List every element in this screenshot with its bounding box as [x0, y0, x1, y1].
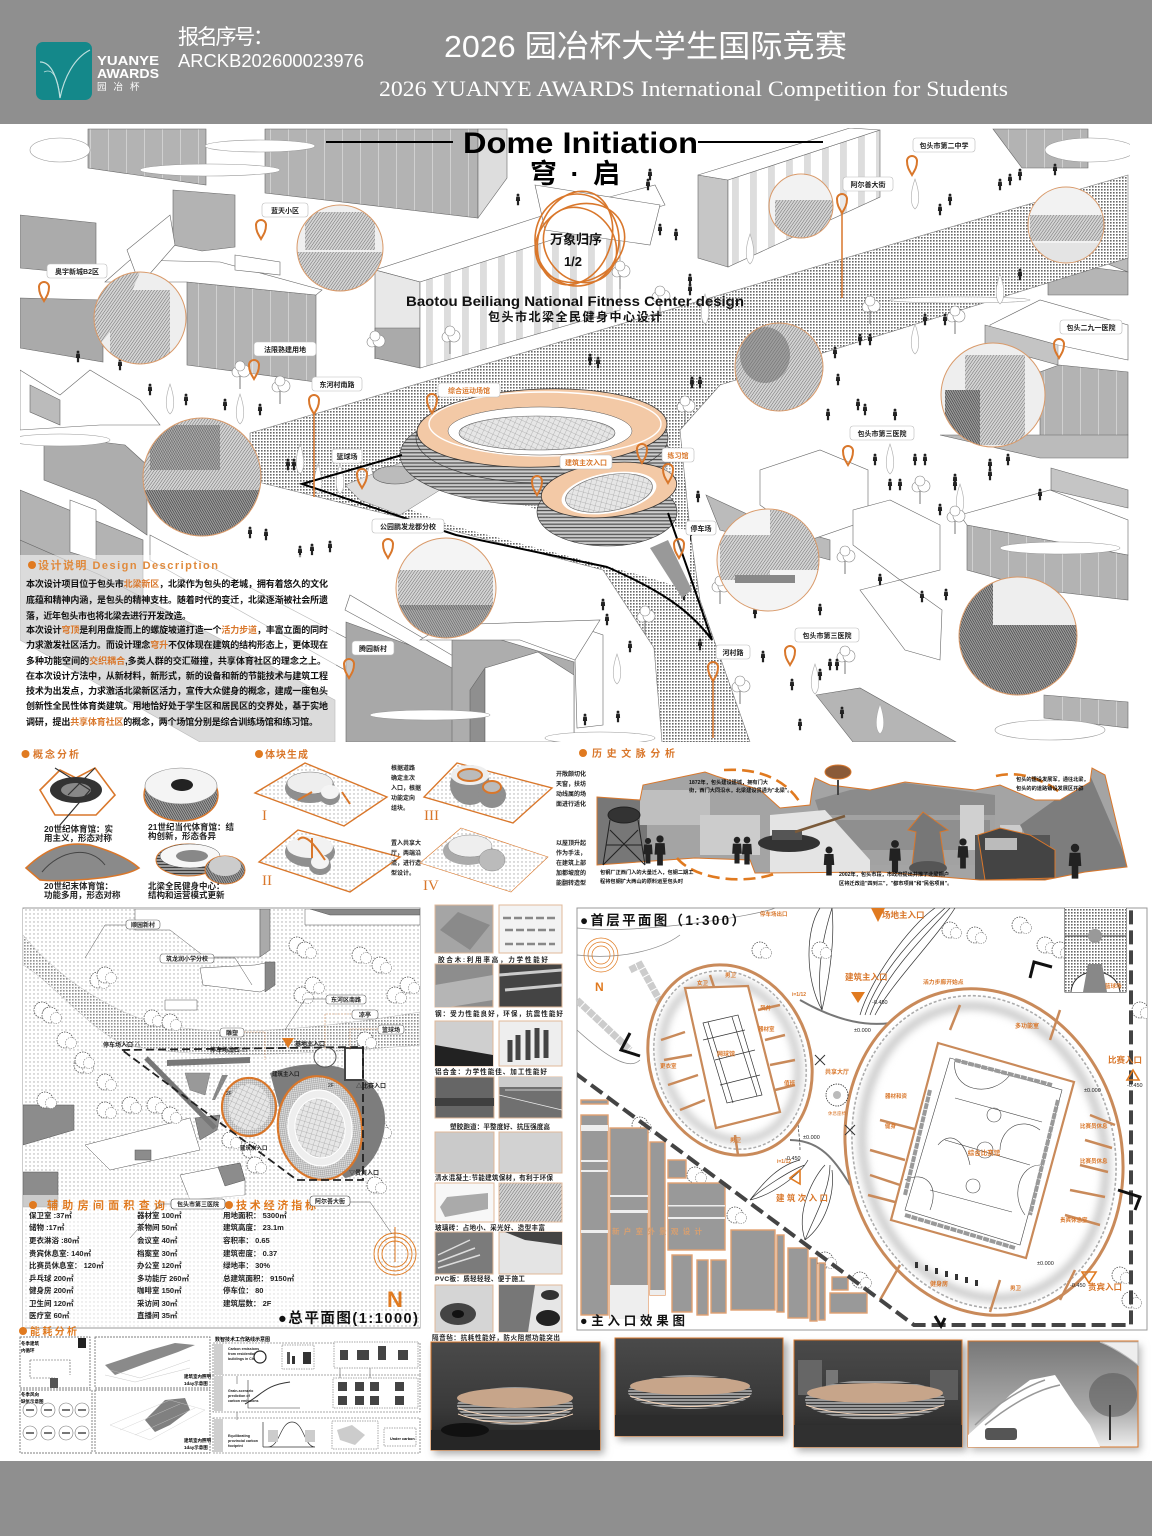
wind diagram: 缺氧示意图: [21, 1398, 44, 1405]
surrounding buildings: [23, 909, 420, 1207]
location labels: 公园鹏发龙都分校: [380, 522, 436, 531]
chinese project name: 包头市北梁全民健身中心设计: [488, 309, 662, 324]
slogan: 万象归序: [550, 232, 602, 247]
plan annotations: 场地主入口: [882, 910, 925, 920]
plan trees: [34, 937, 420, 1194]
step I diagram: [255, 763, 421, 826]
material row: glulam: 胶合木:利用率高，力学性能好: [438, 955, 548, 964]
heading: site plan title: ●总平面图(1:1000): [278, 1309, 418, 1327]
step IV diagram: 加都坡度的: [556, 869, 586, 877]
main hall plan: 健身: [885, 1122, 897, 1130]
icon: 20th century stadium: [40, 768, 115, 825]
plan annotations: i=1/12: [792, 992, 806, 998]
history notes: 街，西门大同沿水，北梁建设贯通为"北梁"。: [689, 786, 792, 794]
caption: 21st century: [148, 822, 234, 841]
location labels: 河村路: [722, 648, 744, 657]
entrance plaza fans: [750, 908, 955, 1240]
header band: [0, 0, 1152, 124]
table: room areas middle: 会议室 40㎡: [137, 1235, 178, 1245]
main hall plan: 比赛员休息: [1080, 1157, 1108, 1165]
plan annotations: ±0.000: [1037, 1261, 1054, 1267]
plan annotations: ±0.000: [1084, 1088, 1101, 1094]
plan labels: 2F: [226, 1091, 232, 1097]
plan labels: 篮球场: [382, 1026, 400, 1034]
material row: plastic floor: 塑胶跑道：平整度好、抗压强度高: [450, 1122, 550, 1131]
crowd of people: [76, 164, 1057, 730]
practice hall plan: 风井: [760, 1004, 772, 1012]
design description: 落，近年包头市也将北梁去进行开发改造。: [26, 610, 191, 621]
table: room areas middle: [137, 1210, 190, 1320]
plan annotations: 比赛入口: [1108, 1055, 1142, 1065]
connector corridor: [790, 999, 888, 1186]
material row: aluminium: 铝合金：力学性能佳、加工性能好: [435, 1067, 547, 1076]
plan labels: 2F: [328, 1083, 334, 1089]
history notes: 包头的建设发展军，通往北梁，: [1016, 775, 1089, 783]
table: room areas left: 比赛员休息室： 120㎡: [29, 1260, 104, 1270]
icon: yuanye logo: AWARDS: [97, 67, 159, 81]
shared hall details: 共享大厅: [825, 1068, 849, 1076]
system diagram: 冬季建筑: [21, 1340, 39, 1347]
plan labels: 停车场出口 △: [210, 1046, 248, 1054]
plan annotations: ±0.000: [854, 1028, 871, 1034]
location labels: 包头市第二中学: [920, 141, 968, 150]
table: room areas left: 健身房 200㎡: [29, 1285, 74, 1295]
design description: 力求激发社区活力。而设计理念穹升不仅体现在建筑的结构形态上，更体现在: [26, 639, 328, 650]
step III diagram: 面进行适化: [556, 800, 586, 808]
heading: chinese name: 穹·启: [530, 159, 620, 189]
caption: 21st century: 构创新，形态各异: [148, 831, 217, 841]
main hall plan: 男卫: [1010, 1285, 1022, 1292]
registration number: 报名序号：: [178, 26, 274, 49]
caption: 20th century: 20世纪体育馆：实: [44, 824, 113, 834]
table: room areas middle: 档案室 30㎡: [137, 1248, 178, 1258]
step II diagram: 置入共享大: [391, 839, 421, 847]
plan labels: 雕塑: [226, 1029, 238, 1037]
design description: 本次设计项目位于包头市北梁新区，北梁作为包头的老城，拥有着悠久的文化: [26, 578, 328, 589]
slogan: 1/2: [564, 254, 582, 269]
plan annotations: i=1/12: [777, 1159, 791, 1165]
caption: 20th century: [44, 824, 113, 843]
location labels: 腾园新村: [359, 644, 387, 653]
step I diagram: 确定主次: [391, 774, 415, 782]
icon: beiliang center: [156, 844, 245, 884]
main hall plan: 健身房: [930, 1280, 948, 1288]
table: technical indicators: 停车位： 80: [223, 1285, 263, 1295]
step IV diagram: 以屋顶升起: [556, 839, 586, 847]
design description: 本次设计穹顶是利用盘旋而上的螺旋坡道打造一个活力步道，丰富立面的同时: [26, 624, 328, 635]
caption: 21st century: 21世纪当代体育馆：结: [148, 822, 234, 832]
location labels: 篮球场: [336, 452, 358, 461]
plan annotations: -0.450: [872, 1000, 888, 1006]
render images: [431, 1338, 1141, 1454]
panel: hero axonometric view: [10, 128, 1135, 744]
caption: late 20th century: 20世纪末体育馆：: [44, 881, 113, 891]
carbon workflow diagram: Carbon emissions: [228, 1347, 259, 1351]
icon: yuanye logo: [36, 42, 159, 100]
people in collage: [643, 835, 1081, 879]
step II diagram: II: [262, 873, 272, 889]
render 4: [968, 1341, 1141, 1451]
table: room areas left: 卫生间 120㎡: [29, 1298, 74, 1308]
stadium podium mask: [411, 490, 690, 584]
water tower: [603, 807, 645, 865]
main hall plan: 器材和资: [885, 1092, 908, 1100]
table: room areas middle: 咖啡室 150㎡: [137, 1285, 182, 1295]
plan annotations: [760, 908, 1143, 1292]
table: technical indicators: 用地面积： 5300㎡: [223, 1210, 287, 1220]
carbon workflow diagram: Under carbon: [390, 1437, 415, 1441]
table: room areas left: [29, 1210, 104, 1320]
heading: Dome Initiation: Dome Initiation: [463, 127, 698, 160]
carbon workflow diagram: buildings in China: [228, 1357, 260, 1361]
surface chart 1: 1day示意图: [184, 1380, 208, 1387]
plan annotations: 贵宾入口: [1088, 1282, 1122, 1292]
english project name: Baotou Beiliang National Fitness Center design: [406, 293, 744, 309]
table: room areas middle: 器材室 100㎡: [137, 1210, 182, 1220]
icon: north arrow small: N: [595, 980, 604, 994]
material row: glulam: [435, 905, 562, 964]
icon: orange scribble circle: [522, 181, 638, 297]
practice hall plan: [222, 1078, 276, 1136]
section markers: [621, 962, 1140, 1326]
carbon workflow diagram: [213, 1336, 420, 1453]
dotted pedestrian road: [250, 175, 1128, 742]
icon: 21st century stadium: [144, 768, 218, 821]
registration number: ARCKB202600023976: [178, 51, 364, 71]
material row: fair-faced concrete: [435, 1132, 562, 1182]
step I diagram: 功能定向: [391, 794, 415, 802]
icon: late 20th century stadium: [26, 844, 139, 881]
practice hall plan: 更衣室: [660, 1062, 677, 1070]
table: room areas middle: 茶物间 50㎡: [137, 1222, 178, 1232]
material row: fair-faced concrete: 清水混凝土:节能建筑保材，有利于环保: [435, 1173, 553, 1182]
table: technical indicators: 总建筑面积： 9150㎡: [223, 1273, 295, 1283]
location labels: 法限熟建用地: [264, 345, 306, 354]
icon: north arrow: [374, 1227, 416, 1312]
plan annotations: 活力步廊开始点: [923, 978, 964, 986]
plan labels: △比赛入口: [356, 1082, 386, 1090]
history notes: 包钢厂正西门入的大量迁入，包钢二期工: [600, 868, 693, 876]
step IV diagram: 作为手法，: [556, 849, 586, 857]
design description: 在本次设计方法中，从新材料，新形式，新的设备和新的节能技术与建筑工程: [26, 670, 328, 681]
render 2: [615, 1338, 788, 1440]
location labels: [47, 138, 1122, 659]
plan labels: 凉亭: [359, 1011, 371, 1019]
main hall plan: 多功能室: [1015, 1022, 1039, 1030]
plan labels: 筑龙润小学分校: [166, 955, 208, 963]
step IV diagram: [420, 828, 586, 894]
main entrance render: [581, 1100, 867, 1321]
callout: hospital: [130, 1199, 225, 1238]
design description overlay: [20, 555, 336, 742]
site boundary: [575, 908, 1131, 1325]
heading: historical context: 历史文脉分析: [592, 747, 676, 760]
step I diagram: 组块。: [391, 804, 409, 812]
table: room areas left: 储物 :17㎡: [29, 1222, 65, 1232]
design description: 底蕴和精神内涵，是包头的精神支柱。随着时代的变迁，北梁逐渐被社会所遗: [26, 594, 328, 605]
photo circles: [90, 174, 1106, 697]
main hall plan: 比赛员休息: [1080, 1122, 1108, 1130]
plan labels: 基地主入口: [295, 1040, 325, 1048]
plan labels: 建筑主入口: [272, 1070, 300, 1078]
plan trees: [632, 917, 1152, 1308]
step I diagram: I: [262, 808, 267, 824]
heading: energy analysis: [19, 1325, 77, 1338]
plan labels: 东河区南路: [331, 996, 361, 1004]
plan annotations: -0.450: [785, 1156, 801, 1162]
render 1: [431, 1342, 604, 1454]
surface chart 2: [95, 1390, 211, 1453]
clouds: [10, 138, 1135, 744]
heading: concept analysis: 概念分析: [33, 748, 80, 761]
basketball court inset: [1065, 908, 1126, 992]
carbon workflow diagram: Grain-scenario: [228, 1389, 254, 1393]
registration number: [178, 26, 364, 71]
practice hall plan: 男卫: [725, 972, 737, 979]
plan labels: 建筑次入口: [240, 1144, 268, 1152]
location labels: 奥宇新城B2区: [55, 267, 99, 276]
panel: materials: [432, 905, 563, 1342]
scenery label: 新户室外景观设计: [612, 1226, 702, 1236]
location labels: 综合运动场馆: [448, 386, 490, 395]
caption: 20th century: 用主义，形态对称: [44, 833, 113, 843]
heading: ground floor plan: ●首层平面图（1:300）: [580, 912, 745, 928]
design description: 调研，提出共享体育社区的概念，两个场馆分别是综合训练场馆和练习馆。: [26, 716, 318, 727]
orange tree: [825, 765, 851, 795]
shared hall details: 休息座椅: [828, 1110, 846, 1117]
step III diagram: [424, 763, 586, 824]
panel: ground floor plan: [575, 908, 1152, 1347]
history notes: 区将迁改造"四到三"，"都市项目"和"民俗项目"。: [839, 879, 952, 887]
caption: late 20th century: 功能多用，形态对称: [44, 890, 121, 900]
material row: steel: 钢：受力性能良好，环保，抗震性能好: [435, 1009, 563, 1018]
step IV diagram: 在建筑上部: [556, 859, 586, 867]
location labels: 阿尔善大街: [850, 180, 886, 189]
site boundary line: [302, 455, 712, 640]
system diagram: [20, 1337, 90, 1388]
design description: [26, 558, 328, 727]
location labels: 包头市第三医院: [858, 429, 906, 438]
location labels: 包头市第三医院: [802, 631, 852, 640]
step II diagram: 厅，两端沿: [391, 849, 421, 857]
practice hall plan: 器材室: [758, 1025, 775, 1033]
material row: PVC: PVC板：质轻轻轻、便于施工: [435, 1274, 525, 1283]
location labels: 包头二九一医院: [1066, 323, 1116, 332]
table: technical indicators: 建筑高度： 23.1m: [223, 1222, 284, 1232]
plan annotations: 建筑次入口: [776, 1193, 828, 1203]
table: room areas middle: 直播间 35㎡: [137, 1310, 178, 1320]
step II diagram: 型设计。: [391, 869, 415, 877]
table: technical indicators: 建筑层数： 2F: [223, 1298, 272, 1308]
callout: street: 阿尔善大街: [315, 1198, 345, 1206]
caption: beiliang center: [148, 881, 225, 900]
heading: auxiliary room areas: 辅助房间面积查询: [47, 1198, 165, 1212]
callout: street: [310, 1196, 392, 1234]
icon: north arrow: N: [387, 1287, 403, 1312]
plan labels: 顺园新村: [131, 921, 155, 929]
table: room areas left: 乒乓球 200㎡: [29, 1273, 74, 1283]
building shadow: [270, 1064, 385, 1178]
step II diagram: 流，进行造: [391, 859, 421, 867]
wind diagram: 冬季风向: [21, 1391, 39, 1398]
step III diagram: 动线属的场: [556, 790, 586, 798]
heading: concept analysis: [22, 748, 80, 761]
surface chart 2: 1day示意图: [184, 1444, 208, 1451]
carbon workflow diagram: Equilibrating: [228, 1434, 250, 1438]
carbon workflow diagram: footprint: [228, 1444, 244, 1448]
table: technical indicators: [223, 1210, 295, 1308]
white text background: [23, 1195, 313, 1327]
roads and parking: [577, 908, 775, 1064]
title block: [326, 127, 823, 324]
carbon workflow diagram: prediction of: [228, 1394, 251, 1398]
material row: insulation: 隔音毡：抗耗性能好，防火阻燃功能突出: [432, 1333, 560, 1342]
dashed orange loop: [677, 770, 1062, 879]
practice hall plan: 男卫: [730, 1137, 742, 1144]
material row: plastic floor: [435, 1077, 562, 1131]
step IV diagram: 能翻转造型: [556, 879, 586, 887]
plan annotations: 停车场出口: [760, 910, 788, 918]
large hall plan: [276, 1075, 364, 1181]
site boundary: [122, 1047, 363, 1180]
panel: energy analysis: [19, 1325, 420, 1453]
competition subtitle: 2026 YUANYE AWARDS International Competition for Students: [379, 76, 1008, 101]
step I diagram: 入口，根据: [391, 784, 421, 792]
step III diagram: 开敞颇切化: [556, 770, 586, 778]
icon: yuanye logo: 园冶杯: [97, 81, 147, 93]
history notes: 1872年，包头建设建城，拥有门大: [689, 778, 769, 786]
carbon workflow diagram: provincial carbon: [228, 1439, 258, 1443]
wind diagram: [20, 1390, 92, 1453]
practice hall: [537, 456, 679, 546]
table: room areas middle: 多功能厅 260㎡: [137, 1273, 190, 1283]
material row: insulation: [432, 1285, 562, 1342]
practice hall plan: [646, 963, 814, 1157]
pagoda incense burner: [908, 812, 948, 875]
caption: beiliang center: 北梁全民健身中心：: [148, 881, 225, 891]
soft shadows: [637, 957, 1144, 1332]
pin markers: [39, 156, 1064, 738]
location labels: 蓝天小区: [271, 206, 299, 215]
render 3: [794, 1340, 967, 1451]
plan annotations: -0.450: [1127, 1083, 1143, 1089]
table: room areas left: 医疗室 60㎡: [29, 1310, 70, 1320]
heading: technical indicators: 技术经济指标: [236, 1198, 316, 1212]
history notes: 2002年，包头市段，市政府提出并推了北梁棚户: [839, 870, 949, 878]
surface chart 1: 建筑室内照明: [184, 1373, 211, 1380]
system diagram: 内循环: [21, 1347, 35, 1354]
table: room areas left: 保卫室 :37㎡: [29, 1210, 72, 1220]
panel: historical context: [579, 747, 1135, 887]
basketball court inset: 篮球场: [1105, 982, 1122, 990]
trees: [166, 179, 1004, 734]
table: room areas left: 更衣淋浴 :80㎡: [29, 1235, 80, 1245]
material row: glass brick: 玻璃砖：占地小、采光好、造型丰富: [435, 1223, 545, 1232]
step III diagram: III: [424, 808, 439, 824]
shared hall details: [815, 1055, 855, 1135]
plan annotations: ±0.000: [803, 1135, 820, 1141]
design description: 设计说明 Design Description: [38, 558, 218, 572]
plan labels: [85, 920, 404, 1177]
callout: hospital: 包头市第三医院: [177, 1200, 219, 1208]
location labels: 东河村南路: [320, 380, 354, 389]
competition title: 2026 园冶杯大学生国际竞赛: [444, 29, 847, 64]
material row: glass brick: [435, 1183, 562, 1232]
panel: massing generation: [255, 748, 586, 894]
history notes: [600, 775, 1089, 887]
footer band: [0, 1461, 1152, 1536]
location labels: 练习馆: [668, 451, 688, 460]
icon: north arrow small: [584, 938, 618, 994]
locomotive: [978, 828, 1055, 880]
table: room areas left: 贵宾休息室: 140㎡: [29, 1248, 92, 1258]
surface chart 2: 建筑室内照明: [184, 1437, 211, 1444]
step II diagram: [259, 830, 421, 892]
main stadium: [400, 385, 670, 505]
history notes: 包头的的道路铺设发展区开辟: [1016, 784, 1084, 792]
main hall plan: [843, 987, 1125, 1317]
table: technical indicators: 绿地率： 30%: [223, 1260, 270, 1270]
material row: steel: [435, 964, 563, 1018]
heading: main entrance render: ●主入口效果图: [580, 1313, 685, 1328]
carbon workflow diagram: 数智技术工作路线示意图: [215, 1336, 270, 1343]
location labels: 停车场: [690, 524, 712, 533]
material row: aluminium: [435, 1021, 562, 1076]
main hall plan: 贵宾休息室: [1060, 1216, 1088, 1224]
planting strips: [167, 1057, 250, 1066]
location labels: 建筑主次入口: [565, 458, 607, 467]
panel: site plan: [23, 908, 420, 1328]
photo collage: [590, 765, 1135, 885]
table: room areas middle: 采访间 30㎡: [137, 1298, 178, 1308]
icon: yuanye logo: YUANYE: [97, 54, 159, 68]
main hall plan: 综合比赛馆: [968, 1148, 1001, 1157]
step IV diagram: IV: [423, 878, 439, 894]
design description: 多种功能空间的交织耦合,多类人群的交汇碰撞，共享体育社区的理念之上。: [26, 655, 326, 666]
tank: [758, 816, 845, 852]
slogan: [550, 232, 602, 269]
plan labels: ▽贵宾入口: [349, 1169, 379, 1177]
surface chart 1: [95, 1337, 211, 1388]
plan annotations: 建筑主入口: [845, 972, 888, 982]
heading: energy analysis: 能耗分析: [30, 1325, 77, 1338]
practice hall plan: 女卫: [697, 979, 709, 987]
road band: [23, 935, 420, 1054]
panel: concept analysis: [22, 748, 245, 900]
carbon workflow diagram: carbon emissions: [228, 1399, 259, 1403]
table: technical indicators: 容积率： 0.65: [223, 1235, 270, 1245]
design description: 创新性全民性体育类建筑。用地恰好处于学生区和居民区的交界处，基于实地: [26, 700, 328, 711]
material row: PVC: [435, 1232, 562, 1283]
practice hall plan: 值班: [784, 1079, 796, 1087]
caption: late 20th century: [44, 881, 121, 900]
plan annotations: -0.450: [1070, 1283, 1086, 1289]
heading: massing generation: [255, 748, 309, 761]
step III diagram: 天窗，扶坊: [556, 780, 586, 788]
design description: 技术为出发点，力求激活北梁新区活力，宣传大众健身的概念，建成一座包头: [26, 685, 328, 696]
history notes: 程将包钢扩大两山的原料运至包头时: [600, 877, 684, 885]
caption: beiliang center: 结构和运营模式更新: [148, 890, 225, 900]
practice hall plan: 网球馆: [717, 1050, 735, 1058]
plan labels: 停车场入口 △: [103, 1041, 141, 1049]
table: technical indicators: 建筑密度： 0.37: [223, 1248, 277, 1258]
step I diagram: 根据道路: [391, 764, 415, 772]
heading: massing generation: 体块生成: [265, 748, 309, 761]
table: room areas middle: 办公室 120㎡: [137, 1260, 182, 1270]
carbon workflow diagram: from residential: [228, 1352, 255, 1356]
